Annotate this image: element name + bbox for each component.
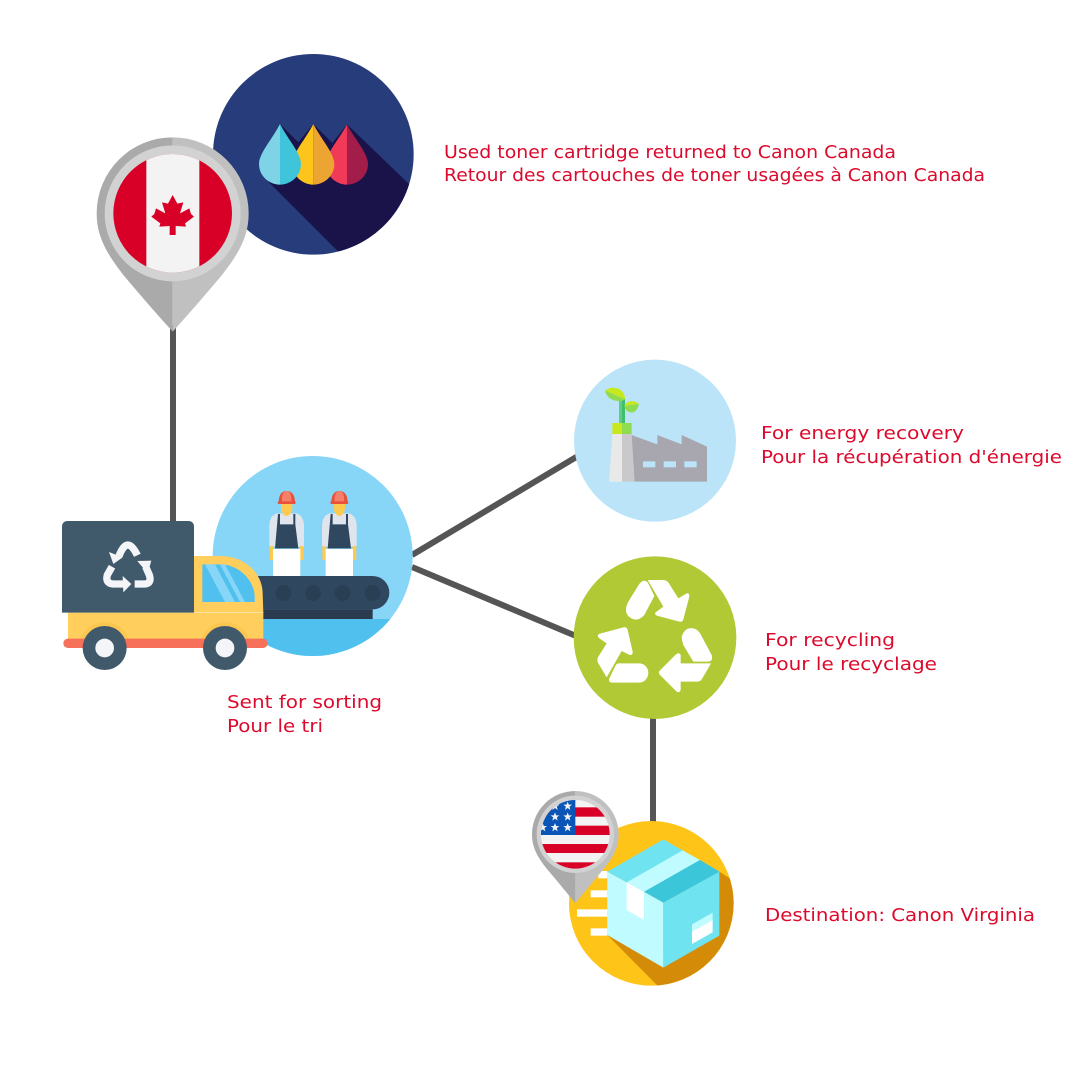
heading: toner return text (444, 142, 985, 186)
connector: sorting to recycling (412, 567, 576, 636)
caption: recycling (765, 630, 937, 675)
icon: recycle symbol on truck (107, 545, 151, 592)
caption: destination: Destination: Canon Virginia (765, 905, 1035, 926)
worker: left (269, 491, 304, 576)
connector: Canada pin to truck (170, 325, 176, 525)
caption: energy recovery (761, 423, 1062, 468)
connector: recycling to destination (650, 715, 656, 825)
caption: sorting: Pour le tri (227, 716, 323, 737)
icon: sorting conveyor circle with workers (210, 456, 417, 659)
connector: sorting to energy recovery (412, 456, 578, 555)
caption: energy recovery: For energy recovery (761, 423, 964, 444)
icon: USA flag location pin (532, 791, 619, 903)
caption: recycling: For recycling (765, 630, 895, 651)
caption: sorting: Sent for sorting (227, 692, 382, 713)
caption: recycling: Pour le recyclage (765, 654, 937, 675)
worker: right (322, 491, 357, 576)
heading: toner return text: Used toner cartridge returned to Canon Canada (444, 142, 896, 163)
icon: toner ink drops circle (213, 54, 414, 255)
icon: green factory circle (574, 360, 736, 522)
icon: recycling truck (62, 521, 268, 670)
icon: recycling symbol circle (574, 556, 736, 719)
caption: energy recovery: Pour la récupération d'énergie (761, 447, 1062, 468)
icon: parcel circle (569, 821, 734, 986)
icon: Canada flag location pin (97, 137, 249, 332)
heading: toner return text: Retour des cartouches de toner usagées à Canon Canada (444, 165, 985, 186)
caption: sorting (227, 692, 382, 737)
